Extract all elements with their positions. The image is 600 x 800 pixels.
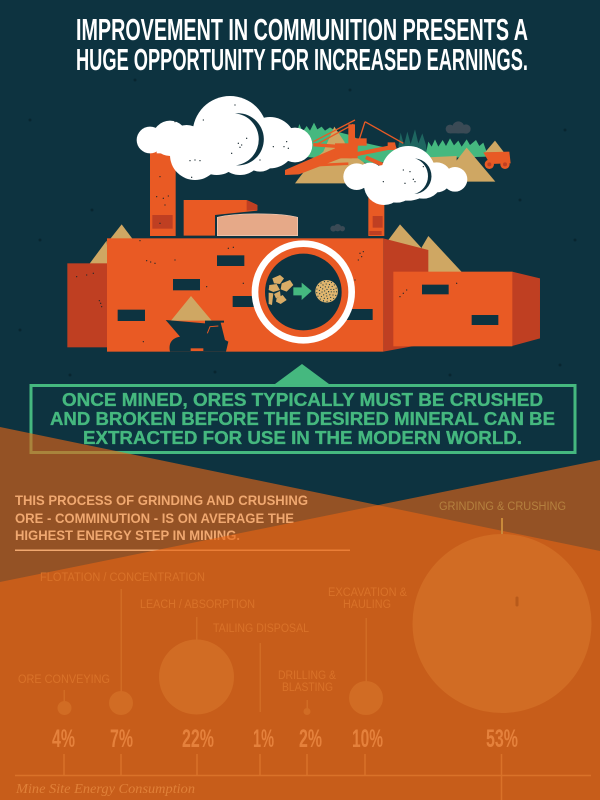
drilling and blasting: DRILLING & bbox=[278, 670, 336, 682]
percentages: 1% bbox=[253, 725, 274, 753]
ore conveying bbox=[18, 674, 110, 715]
green callout: EXTRACTED FOR USE IN THE MODERN WORLD. bbox=[83, 427, 522, 448]
small grey cloud bbox=[330, 224, 345, 232]
left chimney bbox=[150, 147, 176, 236]
percentages: 2% bbox=[299, 725, 322, 753]
leach: LEACH / ABSORPTION bbox=[140, 599, 255, 611]
left orange overlay bbox=[0, 427, 600, 800]
percentages: 10% bbox=[352, 725, 383, 753]
grey distant cloud bbox=[446, 121, 471, 134]
sand piles bbox=[295, 127, 504, 183]
green arrow bbox=[293, 283, 312, 300]
axis and ticks bbox=[15, 754, 591, 800]
stacker reclaimer machine bbox=[285, 120, 403, 175]
title bbox=[76, 12, 528, 77]
crescent bbox=[414, 158, 431, 194]
grinding and crushing bubble bbox=[412, 518, 592, 713]
comminution paragraph: ORE - COMMINUTION - IS ON AVERAGE THE bbox=[15, 511, 294, 526]
coarse rocks bbox=[269, 275, 293, 305]
forest bbox=[290, 123, 488, 163]
small white cloud bbox=[343, 146, 467, 205]
flotation bbox=[40, 572, 205, 715]
percentages: 7% bbox=[110, 725, 133, 753]
tank dome bbox=[217, 214, 298, 236]
green callout: AND BROKEN BEFORE THE DESIRED MINERAL CAN BE bbox=[50, 408, 555, 429]
green pointer triangle bbox=[275, 364, 329, 384]
right block wedge bbox=[512, 272, 540, 346]
sand piles behind factory bbox=[89, 224, 462, 273]
grinding and crushing label: GRINDING & CRUSHING bbox=[439, 501, 566, 513]
factory right side bbox=[383, 238, 428, 352]
comminution paragraph bbox=[15, 493, 350, 551]
left wing bbox=[67, 263, 107, 347]
excavation and hauling bbox=[328, 587, 407, 715]
comminution paragraph: THIS PROCESS OF GRINDING AND CRUSHING bbox=[15, 493, 308, 508]
orange mine truck bbox=[483, 152, 511, 169]
crescent bbox=[235, 113, 264, 165]
factory windows bbox=[118, 255, 498, 325]
tailing disposal: TAILING DISPOSAL bbox=[213, 623, 310, 635]
green callout bbox=[31, 386, 575, 452]
percentages: 22% bbox=[182, 725, 214, 753]
crushed ore bbox=[315, 280, 338, 303]
middle block bbox=[184, 200, 257, 236]
factory and mine illustration bbox=[67, 96, 540, 352]
ore conveying: ORE CONVEYING bbox=[18, 674, 110, 686]
leach bbox=[140, 599, 255, 714]
right chimney bbox=[368, 197, 384, 236]
green callout: ONCE MINED, ORES TYPICALLY MUST BE CRUSHED bbox=[62, 389, 543, 410]
drilling and blasting: BLASTING bbox=[282, 682, 333, 694]
factory main building bbox=[107, 238, 383, 352]
right orange overlay bbox=[0, 460, 600, 800]
excavation and hauling: EXCAVATION & bbox=[328, 587, 407, 599]
large white cloud bbox=[137, 96, 312, 180]
magnifier circle: comminution bbox=[255, 244, 352, 340]
drilling and blasting bbox=[278, 670, 336, 715]
mine scene bbox=[285, 120, 511, 183]
percentages: 53% bbox=[486, 725, 518, 753]
dump truck with sand bbox=[166, 296, 228, 352]
tailing disposal bbox=[213, 623, 310, 712]
excavation and hauling: HAULING bbox=[343, 599, 391, 611]
speckle texture bbox=[77, 177, 457, 342]
comminution paragraph: HIGHEST ENERGY STEP IN MINING. bbox=[15, 528, 240, 543]
percentages bbox=[52, 725, 518, 753]
right block bbox=[393, 272, 512, 346]
axis title: Mine Site Energy Consumption bbox=[15, 782, 195, 797]
flotation: FLOTATION / CONCENTRATION bbox=[40, 572, 205, 584]
energy consumption chart bbox=[15, 501, 591, 800]
percentages: 4% bbox=[52, 725, 75, 753]
